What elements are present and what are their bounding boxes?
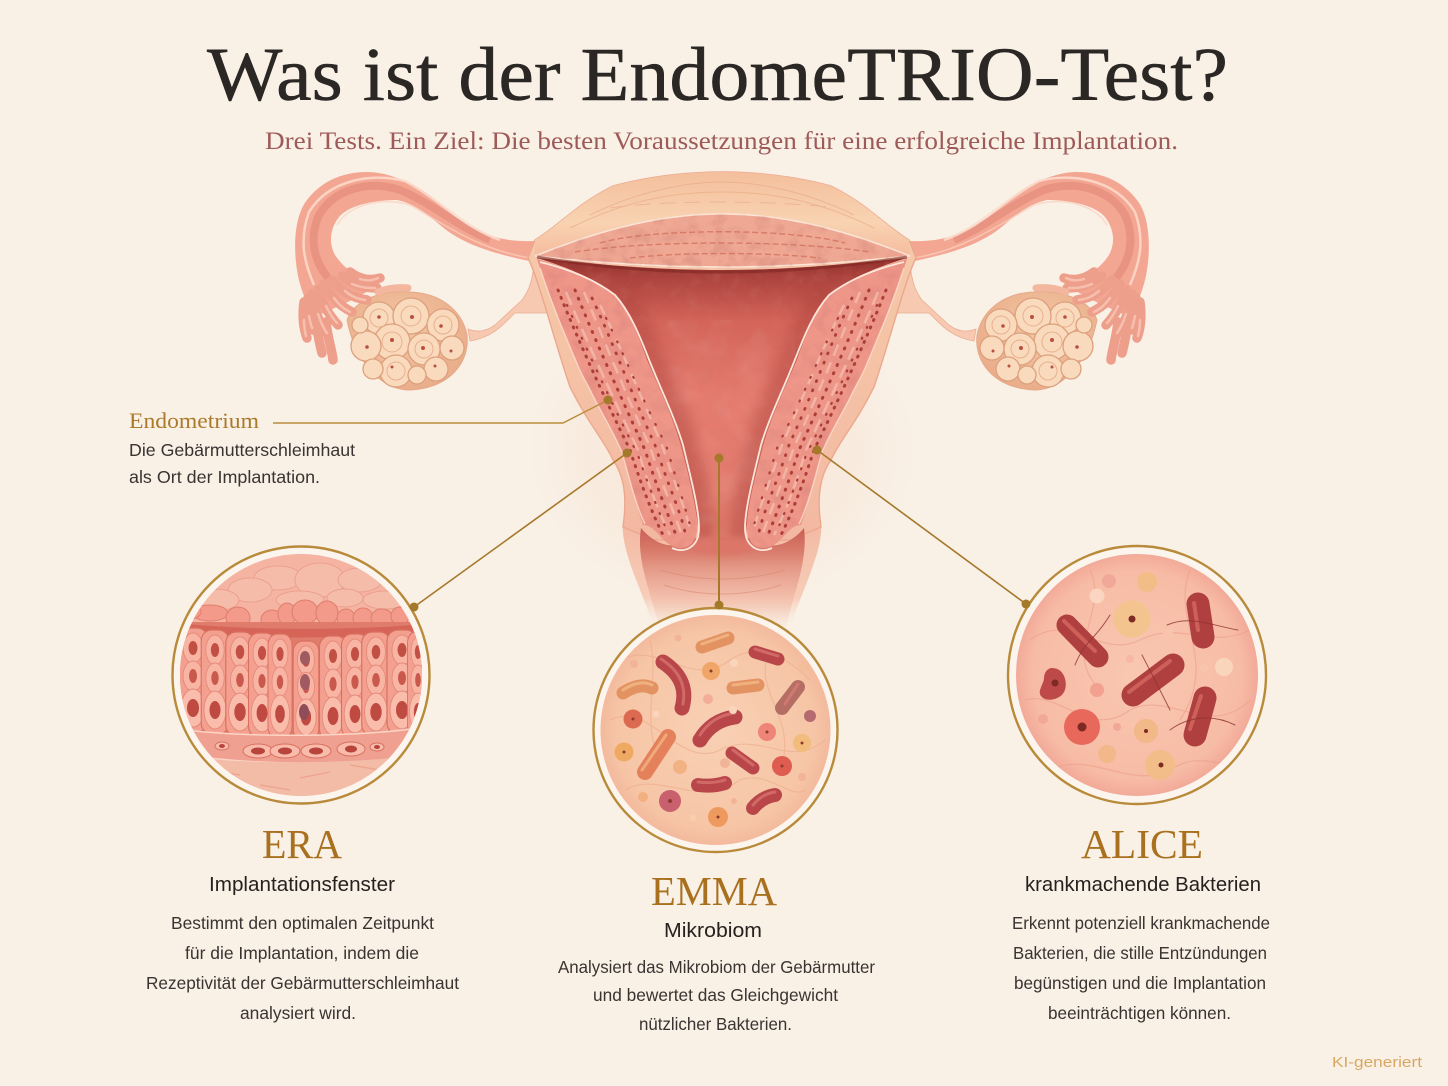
rod bacteria: [1064, 603, 1238, 735]
ovary: [347, 292, 467, 390]
uterus illustration: [295, 172, 1149, 630]
panel: ALICE text: ALICE: [1081, 821, 1203, 867]
panel: ALICE text: Bakterien, die stille Entzündungen: [1013, 943, 1267, 963]
rod bacteria: [623, 635, 798, 808]
panel: EMMA text: und bewertet das Gleichgewicht: [593, 985, 838, 1005]
panel: ERA text: Rezeptivität der Gebärmutterschleimhaut: [146, 973, 459, 993]
footer note: KI-generiert: [1332, 1054, 1423, 1071]
callout: Endometrium: als Ort der Implantation.: [129, 467, 320, 487]
panel: EMMA text: [558, 868, 875, 1034]
panel: ERA text: analysiert wird.: [240, 1003, 356, 1023]
uterine cavity: [530, 255, 915, 550]
panel: ALICE text: krankmachende Bakterien: [1025, 873, 1261, 896]
callout: Endometrium: [129, 396, 612, 487]
upper epithelium bubbles: [194, 562, 409, 622]
connector: EMMA: [714, 454, 724, 605]
fallopian tube: [295, 172, 545, 318]
endometrium right: [739, 255, 914, 555]
panel: EMMA text: EMMA: [651, 868, 777, 914]
fundus: [535, 172, 910, 256]
panel: ERA text: ERA: [262, 821, 342, 867]
panel: ERA text: [146, 821, 459, 1023]
cell columns: [178, 628, 428, 740]
subtitle: Drei Tests. Ein Ziel: Die besten Voraussetzungen für eine erfolgreiche Implantation.: [265, 128, 1178, 155]
cocci: [614, 634, 816, 827]
panel: ALICE text: Erkennt potenziell krankmachende: [1012, 913, 1270, 933]
irregular coccus: [1040, 668, 1066, 700]
icon: mirrored right tube and ovary: [894, 172, 1149, 390]
fimbriae: [303, 272, 408, 360]
circle: ERA tissue: [169, 545, 432, 805]
circle: ALICE pathogens: [1008, 546, 1266, 804]
panel: ALICE text: [1012, 821, 1270, 1023]
panel: ERA text: Implantationsfenster: [209, 873, 395, 896]
panel: ALICE text: begünstigen und die Implantation: [1014, 973, 1266, 993]
endometrium left: [530, 255, 705, 555]
uterine body wall: [528, 172, 916, 540]
panel: ALICE text: beeinträchtigen können.: [1048, 1003, 1231, 1023]
cervical canal: [640, 528, 805, 630]
myometrium cross-section: [534, 213, 910, 268]
callout: Endometrium: Endometrium: [129, 408, 260, 433]
circle: EMMA microbiome: [594, 600, 838, 852]
title: Was ist der EndomeTRIO-Test?: [207, 33, 1228, 117]
connector: ALICE: [812, 446, 1026, 604]
panel: EMMA text: Mikrobiom: [664, 919, 762, 942]
panel: EMMA text: Analysiert das Mikrobiom der Gebärmutter: [558, 957, 875, 977]
connector: ERA: [414, 448, 632, 607]
basal layer: [194, 728, 410, 762]
panel: ERA text: Bestimmt den optimalen Zeitpunkt: [171, 913, 434, 933]
lower stroma: [214, 758, 388, 796]
panel: EMMA text: nützlicher Bakterien.: [639, 1014, 792, 1034]
lower cervix: [623, 520, 821, 630]
panel: ERA text: für die Implantation, indem die: [185, 943, 419, 963]
callout: Endometrium: Die Gebärmutterschleimhaut: [129, 440, 355, 460]
cocci: [1038, 572, 1233, 780]
